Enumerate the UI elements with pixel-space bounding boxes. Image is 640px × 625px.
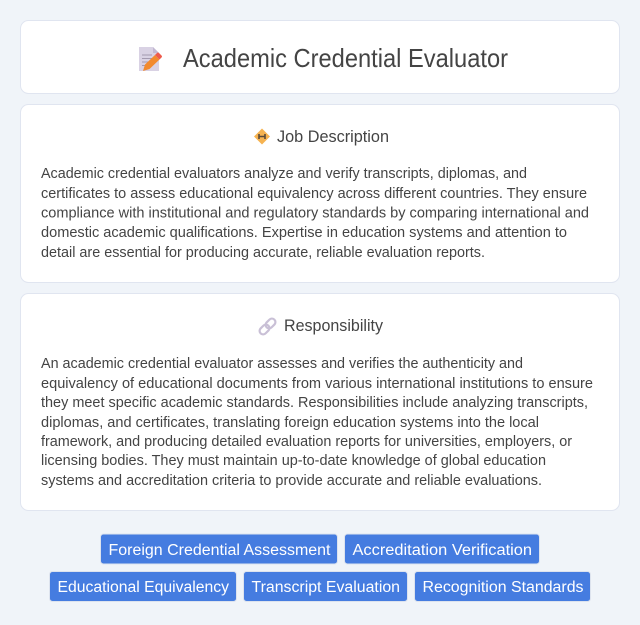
title: Academic Credential Evaluator bbox=[183, 45, 508, 73]
tag: recognition standards: Recognition Standards bbox=[422, 579, 584, 596]
text block: job description bbox=[41, 166, 589, 261]
tag: transcript evaluation: Transcript Evaluation bbox=[252, 579, 400, 596]
panel: title header bbox=[20, 20, 620, 94]
text block: responsibility: framework, and producing detailed evaluation reports for universities, employers, or bbox=[41, 434, 572, 450]
text block: job description: Academic credential evaluators analyze and verify transcripts, diplomas, and bbox=[41, 166, 527, 182]
text block: responsibility: systems and accreditation criteria to provide accurate and reliable evaluations. bbox=[41, 473, 542, 489]
text block: job description: certificates to assess educational equivalency across different countries. They ensure bbox=[41, 186, 587, 202]
text block: responsibility: licensing bodies. They must maintain up-to-date knowledge of global education bbox=[41, 453, 546, 469]
tag: accreditation verification: Accreditation Verification bbox=[352, 542, 532, 559]
tag: foreign credential assessment bbox=[100, 534, 338, 564]
tag: transcript evaluation bbox=[244, 572, 408, 602]
text block: job description: detail are essential for producing accurate, reliable evaluation reports. bbox=[41, 245, 485, 261]
tag: recognition standards bbox=[414, 572, 590, 602]
text block: job description: compliance with institutional and regulatory standards by comparing international and bbox=[41, 206, 589, 222]
text block: responsibility: diplomas, and certificates, translating foreign education systems into the local bbox=[41, 415, 539, 431]
heading: responsibility: Responsibility bbox=[284, 317, 384, 335]
icon: diamond sign bbox=[254, 128, 270, 144]
panel: responsibility bbox=[20, 294, 620, 510]
heading: job description: Job Description bbox=[277, 128, 389, 146]
panel: job description bbox=[20, 104, 620, 282]
tag: accreditation verification bbox=[344, 534, 540, 564]
text block: responsibility: equivalency of educational documents from various international institutions to ensure bbox=[41, 376, 593, 392]
tag: educational equivalency bbox=[50, 572, 236, 602]
tag: foreign credential assessment: Foreign Credential Assessment bbox=[108, 542, 331, 559]
icon: chain link bbox=[258, 317, 277, 336]
text block: responsibility: they meet specific academic standards. Responsibilities include analyzing transcripts, bbox=[41, 395, 588, 411]
text block: responsibility bbox=[41, 356, 593, 489]
text block: job description: domestic academic qualifications. Expertise in education systems and attention to bbox=[41, 225, 567, 241]
tag: educational equivalency: Educational Equivalency bbox=[58, 579, 229, 596]
text block: responsibility: An academic credential evaluator assesses and verifies the authenticity and bbox=[41, 356, 523, 372]
icon: document with pencil bbox=[139, 47, 162, 71]
